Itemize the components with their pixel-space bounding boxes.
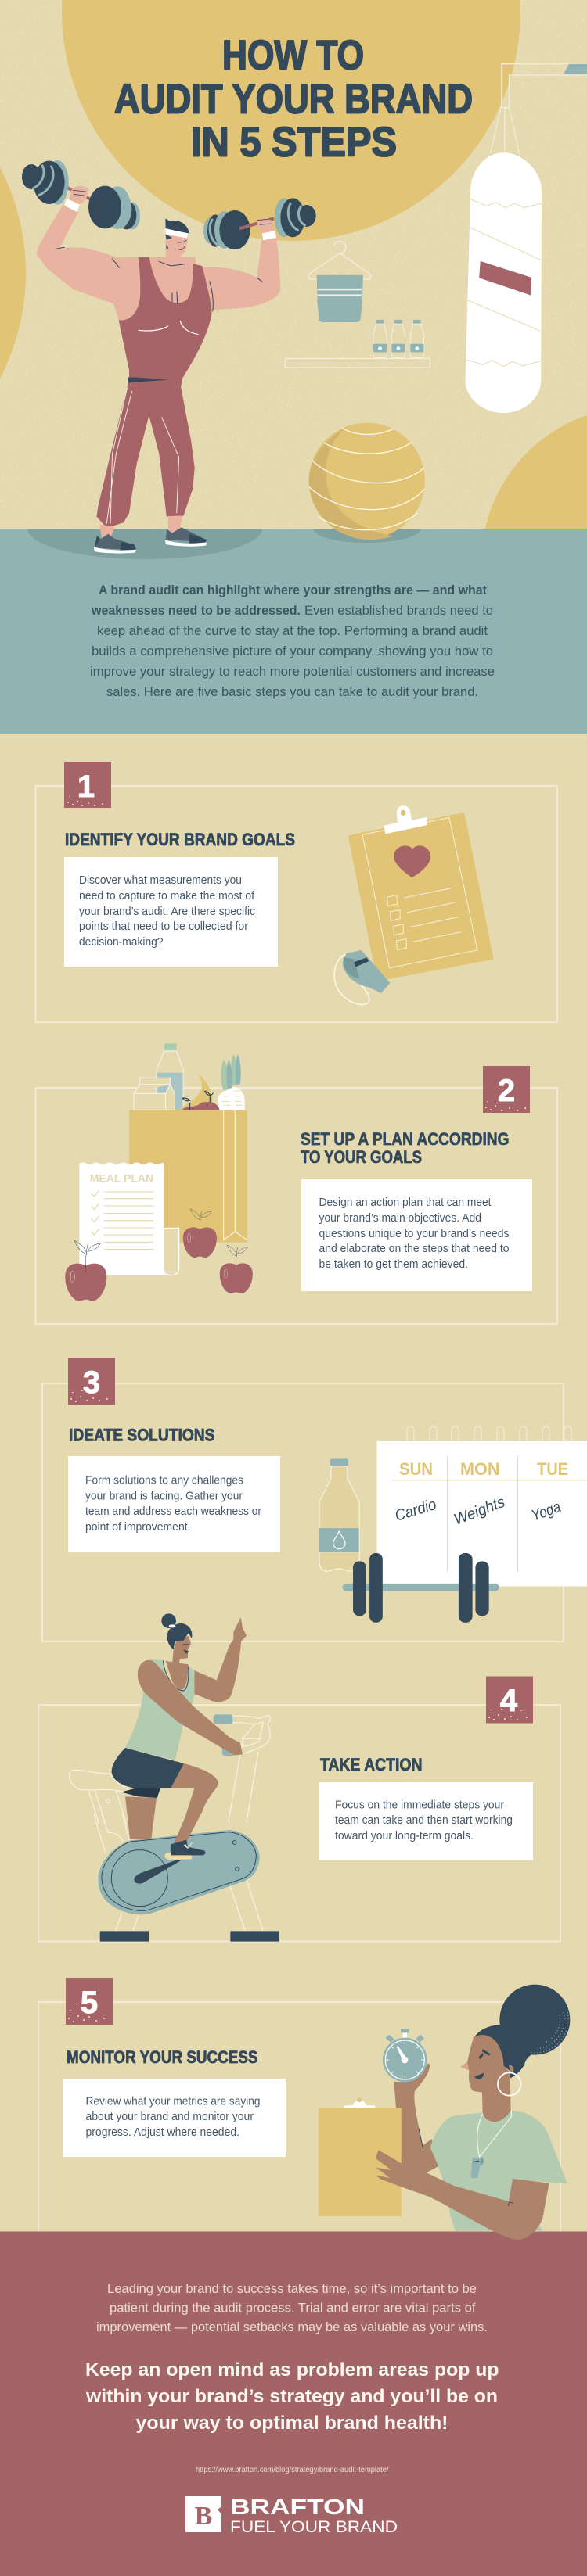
man's shoes and ankles [94,515,207,553]
brafton logo: FUEL YOUR BRAND [230,2518,398,2536]
face and neck [460,2035,511,2122]
number badge [486,1677,533,1724]
heading: SET UP A PLAN ACCORDING [301,1129,509,1149]
frame [38,2002,560,2231]
face details [178,240,187,249]
face details [474,2049,491,2079]
closing callout [85,2359,499,2434]
muscle lines [56,247,263,311]
text box: Form solutions to any challenges [85,1475,243,1487]
shoe [171,1840,206,1855]
arm crease [419,2129,423,2149]
chest skin [139,257,196,307]
step 2 panel [36,1043,557,1324]
left yellow circle [0,44,26,502]
calendar: Yoga [529,1498,563,1525]
text box: team and address each weakness or [85,1505,261,1518]
number badge [64,762,111,808]
title [114,33,473,166]
banana [178,1074,213,1110]
text box [64,857,278,967]
title: IN 5 STEPS [191,119,397,166]
paper bag [129,1110,247,1243]
closing text: Leading your brand to success takes time, so it’s important to be [107,2282,477,2296]
closing text [96,2282,488,2334]
brafton logo: BRAFTON [230,2495,365,2519]
number badge: 2 [498,1074,515,1108]
text box: Review what your metrics are saying [86,2096,260,2108]
calendar: Cardio [393,1496,438,1525]
large yellow circle [62,0,520,241]
left arm [37,203,140,320]
clipboard [349,805,492,980]
ear [509,2065,513,2073]
heading: MONITOR YOUR SUCCESS [67,2047,258,2067]
apples [182,1102,220,1110]
whistle [334,950,390,1005]
frame [42,1383,564,1641]
number badge [66,1978,113,2025]
text box [301,1179,532,1291]
hero panel [0,0,587,719]
title: AUDIT YOUR BRAND [114,77,473,122]
text box: your brand is facing. Gather your [85,1491,243,1503]
left dumbbell [22,160,140,229]
heading: TAKE ACTION [320,1755,423,1774]
right arm [202,235,280,310]
closing callout: within your brand’s strategy and you’ll be on [85,2386,498,2407]
heading: IDENTIFY YOUR BRAND GOALS [65,830,295,849]
closing callout: your way to optimal brand health! [136,2413,448,2434]
text box [319,1782,533,1860]
text box: Design an action plan that can meet [319,1197,492,1209]
calendar: Weights [452,1494,507,1529]
frame [36,1088,557,1324]
chest [166,1661,189,1690]
dumbbell [343,1553,499,1623]
greens [221,1054,239,1089]
text box: Focus on the immediate steps your [335,1799,504,1811]
step 3 panel [42,1358,587,1641]
text box [63,2079,286,2157]
clipboard on step 5 [319,2098,402,2216]
hero illustrations [96,64,587,540]
number badge: 1 [77,770,95,804]
speckled wall texture [0,0,587,529]
hair [165,218,189,249]
exercise ball [309,423,425,540]
intro text: weaknesses need to be addressed. [91,604,301,618]
step 4 panel [38,1613,560,1942]
text box: Discover what measurements you [79,874,242,887]
woman on exercise bike [70,1613,279,1942]
water bottle [319,1459,359,1571]
carton [134,1078,175,1110]
text box: points that need to be collected for [79,920,248,933]
step 5 panel [38,1978,560,2231]
groceries above bag [134,1043,245,1110]
heading [301,1129,509,1167]
text box: your brand’s audit. Are there specific [79,906,255,918]
text box: and elaborate on the steps that need to [319,1243,509,1255]
man's pants [96,379,195,528]
frame [38,1705,560,1941]
front leg [171,1763,218,1844]
headband [165,228,188,239]
man upper body with dumbbells [22,160,316,391]
intro text: improve your strategy to reach more potential customers and increase [90,665,495,679]
number badge [483,1066,530,1113]
meal plan sheet: MEAL PLAN [90,1173,153,1186]
heading: TO YOUR GOALS [301,1147,422,1167]
icon: grocery bag and meal plan [65,1110,253,1301]
right dumbbell [203,198,316,249]
intro text: sales. Here are five basic steps you can take to audit your brand. [106,685,478,699]
text box: questions unique to your brand’s needs [319,1228,509,1240]
calendar: MON [460,1459,499,1479]
earring [498,2072,520,2096]
nose [460,2062,469,2070]
footer panel [0,2232,587,2576]
raised arm [394,2063,438,2182]
hair cap [473,2025,532,2078]
intro text: keep ahead of the curve to stay at the top. Performing a brand audit [97,624,488,638]
brafton logo [185,2495,398,2536]
water bottles on shelf [285,320,430,368]
apples [65,1209,253,1301]
text box: about your brand and monitor your [86,2111,254,2123]
right yellow circle [481,407,587,719]
closing text: patient during the audit process. Trial and error are vital parts of [110,2301,476,2315]
calendar: TUE [537,1459,568,1479]
milk bottle [157,1043,183,1110]
coach hand and forearm [376,2150,549,2240]
text box: point of improvement. [85,1521,191,1534]
floor shadows [27,529,421,559]
text box [68,1456,280,1552]
number badge: 5 [81,1986,98,2020]
number badge [68,1358,115,1405]
closing callout: Keep an open mind as problem areas pop up [85,2359,499,2380]
intro text [90,583,495,699]
heading: IDEATE SOLUTIONS [69,1425,214,1445]
text box: be taken to get them achieved. [319,1258,468,1271]
bike lower section [94,1814,279,1942]
raised arm [194,1617,247,1702]
handle grips [214,1714,232,1724]
calendar: SUN [399,1459,433,1479]
coach woman with stopwatch [383,1985,570,2231]
head [161,1613,192,1664]
lanyard and whistle [471,2110,511,2178]
tank top [125,1659,194,1760]
stopwatch [383,2029,427,2082]
text box: team can take and then start working [335,1814,513,1827]
intro text: A brand audit can highlight where your strengths are — and what [99,583,487,597]
turnips [218,1087,245,1110]
hair bun [499,1985,570,2055]
water bottle and dumbbell [319,1459,499,1623]
source url: https://www.brafton.com/blog/strategy/brand-audit-template/ [196,2465,389,2474]
text box: decision-making? [79,936,163,949]
text box: progress. Adjust where needed. [86,2126,239,2139]
shirt [430,2110,567,2231]
brafton logo: B [195,2502,212,2531]
icon: clipboard and whistle [334,805,492,1005]
front arm [138,1660,243,1755]
intro text: builds a comprehensive picture of your company, showing you how to [92,644,493,658]
shorts [112,1748,184,1788]
text box: toward your long-term goals. [335,1830,474,1842]
text box: need to capture to make the most of [79,890,255,902]
punching bag [466,64,587,413]
step 1 panel [36,762,557,1022]
title: HOW TO [222,33,364,78]
frame [36,786,557,1022]
intro text: Even established brands need to [304,604,493,618]
text box: your brand’s main objectives. Add [319,1212,481,1225]
hanger and towel [309,241,371,322]
intro teal panel [0,529,587,734]
closing text: improvement — potential setbacks may be as valuable as your wins. [96,2320,488,2334]
bike frame upper [88,1715,270,1824]
belt [128,377,168,382]
tank top [119,257,212,391]
back leg [125,1796,157,1839]
number badge: 3 [83,1365,100,1400]
neck and face [162,235,188,266]
seat [70,1770,135,1795]
calendar [377,1426,587,1586]
meal plan sheet [79,1162,179,1275]
number badge: 4 [500,1684,518,1718]
